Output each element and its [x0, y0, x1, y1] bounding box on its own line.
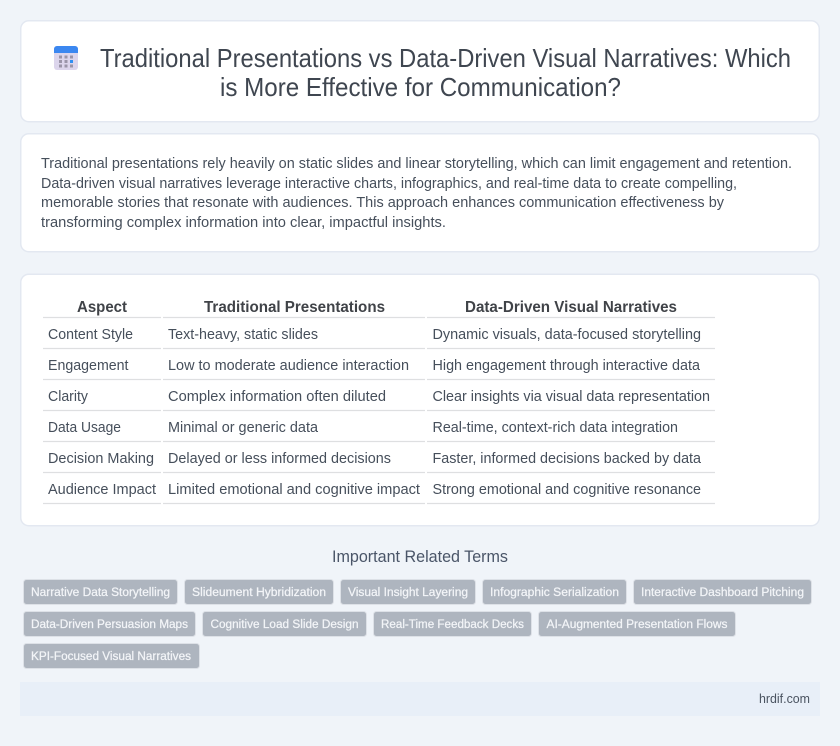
- table row: data usage: [48, 420, 678, 436]
- tag: Real-Time Feedback Decks: [381, 617, 524, 631]
- panel: introduction: [21, 134, 819, 252]
- tag: [374, 612, 532, 636]
- table row: clarity: Clear insights via visual data representation: [432, 389, 710, 405]
- title: Traditional Presentations vs Data-Driven Visual Narratives: Which: [100, 45, 791, 73]
- table row: audience impact: Limited emotional and cognitive impact: [168, 482, 420, 498]
- title: is More Effective for Communication?: [220, 74, 621, 102]
- table row: engagement: [48, 358, 701, 374]
- table row: audience impact: Audience Impact: [48, 482, 156, 498]
- tag: [202, 612, 366, 636]
- table row: engagement: Low to moderate audience interaction: [168, 358, 409, 374]
- tag: [634, 580, 812, 604]
- table row: clarity: [48, 389, 710, 405]
- tag: [24, 580, 178, 604]
- table row: content style: Text-heavy, static slides: [168, 327, 318, 343]
- table row: audience impact: Strong emotional and cognitive resonance: [432, 482, 701, 498]
- table row: engagement: High engagement through interactive data: [432, 358, 701, 374]
- footer bar: [20, 682, 820, 716]
- table header row: Traditional Presentations: [204, 299, 385, 316]
- text block: introduction paragraph: memorable stories that resonate with audiences. This approach enhances communication effectiveness by: [41, 195, 725, 211]
- tag: [482, 580, 626, 604]
- table row: content style: [48, 327, 701, 343]
- tag: [24, 612, 196, 636]
- tag: [184, 580, 334, 604]
- table header row: [77, 299, 677, 316]
- tag: [538, 612, 736, 636]
- table header row: Data-Driven Visual Narratives: [465, 299, 677, 316]
- table row: data usage: Minimal or generic data: [168, 420, 319, 436]
- heading: important related terms: Important Related Terms: [332, 548, 508, 566]
- tag: AI-Augmented Presentation Flows: [546, 617, 728, 631]
- table row: decision making: Faster, informed decisions backed by data: [432, 451, 702, 467]
- tag: Slideument Hybridization: [192, 585, 326, 599]
- tag: Visual Insight Layering: [348, 585, 468, 599]
- footer bar: hrdif.com: [759, 691, 810, 706]
- text block: introduction paragraph: [41, 156, 792, 231]
- text block: introduction paragraph: Data-driven visual narratives leverage interactive charts, infographics, and real-time data to create compelling,: [41, 176, 737, 192]
- text block: introduction paragraph: Traditional presentations rely heavily on static slides and linear storytelling, which can limit engagement and retention.: [41, 156, 792, 172]
- table row: clarity: Clarity: [48, 389, 89, 405]
- table row: data usage: Data Usage: [48, 420, 121, 436]
- tag: KPI-Focused Visual Narratives: [31, 649, 191, 663]
- table row: content style: Dynamic visuals, data-focused storytelling: [432, 327, 701, 343]
- table row: audience impact: [48, 482, 701, 498]
- tag: Narrative Data Storytelling: [31, 585, 170, 599]
- table row: data usage: Real-time, context-rich data integration: [432, 420, 678, 436]
- title: [100, 45, 791, 102]
- table row: content style: Content Style: [48, 327, 133, 343]
- tag: Interactive Dashboard Pitching: [641, 585, 804, 599]
- text block: introduction paragraph: transforming complex information into clear, impactful insights.: [41, 215, 446, 231]
- panel: comparison table: [21, 274, 819, 526]
- tag: Data-Driven Persuasion Maps: [31, 617, 188, 631]
- tag: Infographic Serialization: [490, 585, 619, 599]
- table row: clarity: Complex information often diluted: [168, 389, 386, 405]
- table row: engagement: Engagement: [48, 358, 128, 374]
- table row: decision making: [48, 451, 702, 467]
- table row: decision making: Decision Making: [48, 451, 154, 467]
- table row: decision making: Delayed or less informed decisions: [168, 451, 391, 467]
- tag: Cognitive Load Slide Design: [210, 617, 358, 631]
- table header row: Aspect: [77, 299, 127, 316]
- tag: [340, 580, 476, 604]
- panel: title header: [21, 21, 819, 122]
- icon: calendar: [54, 46, 78, 70]
- panel: related term tags: [24, 580, 812, 668]
- tag: [24, 644, 200, 668]
